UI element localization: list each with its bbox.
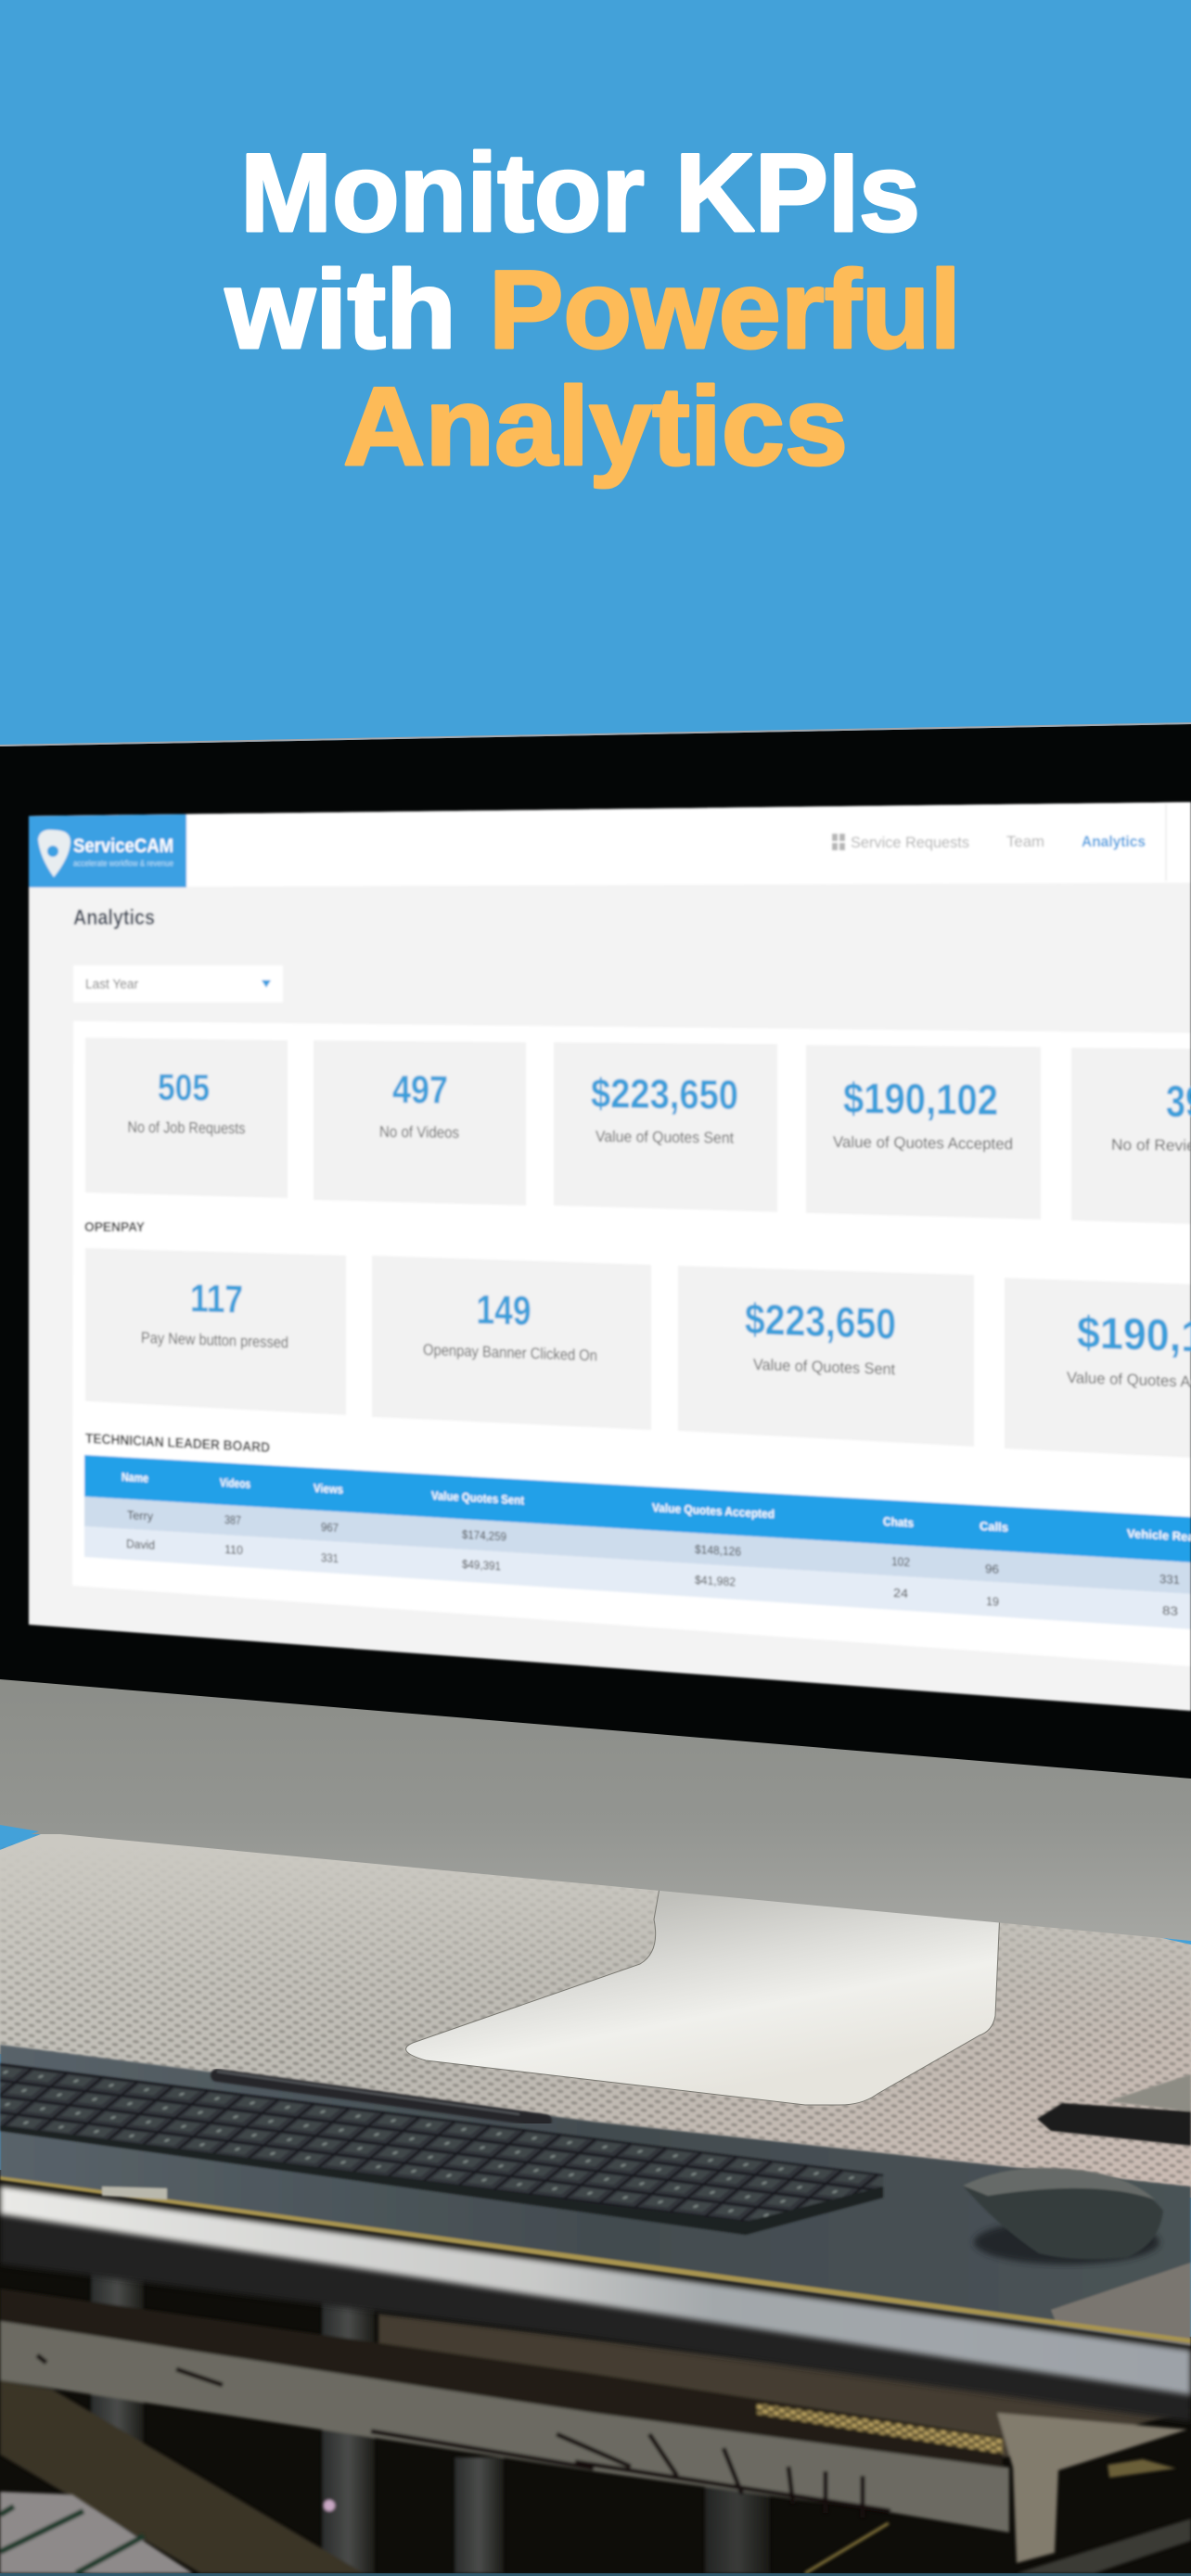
table row: Terry: 96 [985,1562,999,1576]
navigation [832,804,1166,881]
KPI card: quotes sent: $223,650 [591,1071,738,1118]
dark desk mat [0,2045,1191,2346]
monitor top edge highlight [0,723,1191,746]
table header row: Value Quotes Sent [431,1488,525,1508]
leader board table [84,1455,1191,1629]
navigation: Team [1006,833,1044,850]
table row: David: $49,391 [462,1557,501,1573]
table row: Terry: 967 [321,1520,339,1535]
table row: Terry [84,1497,1191,1594]
table row: Terry: Terry [127,1508,153,1524]
table header row: Views [314,1481,343,1497]
under-desk dark background [0,2170,1191,2576]
Openpay card: pay now: Pay New button pressed [141,1329,288,1352]
right blue wedge [1162,1938,1191,1945]
Openpay card: pay now: 117 [190,1276,243,1321]
KPI card: job requests: No of Job Requests [128,1118,245,1138]
table row: David: 110 [224,1542,243,1557]
monitor bezel [0,724,1191,1779]
logo block: accelerate workflow & revenue [73,859,173,868]
blue left wedge [0,1825,39,1845]
navigation: Analytics [1082,833,1146,850]
monitor [0,723,1191,1941]
logo block [29,814,186,887]
table row: David: David [126,1537,155,1552]
KPI card: videos [314,1040,526,1205]
table row: Terry: $148,126 [695,1542,741,1559]
date dropdown: Last Year [85,976,138,992]
title: Monitor KPIs [240,131,920,255]
table header row: Videos [220,1475,250,1491]
Openpay card: banner clicks: 149 [477,1287,531,1334]
page heading: Analytics [73,905,155,929]
KPI card: videos: 497 [392,1067,448,1112]
table row: Terry: $174,259 [462,1527,506,1544]
Openpay card: banner clicks [372,1256,651,1430]
KPI card: reviews [1071,1048,1191,1224]
KPI card: quotes accepted [806,1045,1041,1219]
KPI card: quotes accepted: $190,102 [843,1074,998,1124]
perforated desk surface [0,1827,1191,2198]
header bar [29,802,1191,887]
screen background [29,802,1191,1711]
phone and glass on desk [1037,2074,1191,2146]
table row: Terry: 331 [1159,1572,1180,1587]
metal rail [0,2186,1191,2422]
dashboard screen [29,802,1191,1711]
Openpay card: quotes sent: Value of Quotes Sent [753,1356,895,1378]
monitor stand [406,1882,1000,2105]
KPI card: quotes accepted: Value of Quotes Accepted [833,1133,1013,1153]
table row: David: 24 [893,1586,908,1600]
Openpay card: quotes accepted [1005,1278,1191,1458]
bottom edge strip [0,2573,1191,2576]
table row: Terry: 387 [224,1512,241,1527]
table header row: Name [122,1470,148,1486]
KPI card: quotes sent [554,1042,777,1212]
date dropdown [73,965,283,1002]
mouse [963,2168,1163,2264]
KPI card: job requests [85,1038,288,1198]
section heading: technician leader board: TECHNICIAN LEADER BOARD [85,1431,270,1456]
pen [217,2072,545,2121]
title: with [224,248,456,372]
logo block: ServiceCAM [73,835,173,857]
KPI card: quotes sent: Value of Quotes Sent [596,1128,734,1147]
section heading: Openpay: OPENPAY [84,1219,145,1235]
KPI card: videos: No of Videos [379,1123,459,1141]
title: Powerful [489,248,961,372]
white content panel [72,1021,1191,1666]
Openpay card: pay now [85,1248,346,1415]
Openpay card: quotes sent: $223,650 [745,1294,896,1348]
title [224,131,961,489]
KPI card: job requests: 505 [158,1067,210,1109]
table header row: Calls [980,1519,1008,1535]
table row: David [84,1526,1191,1629]
table row: David: $41,982 [695,1573,736,1588]
table header row: Value Quotes Accepted [652,1500,775,1521]
table row: David: 83 [1162,1603,1178,1618]
crate at lower left [0,2492,193,2573]
table row: David: 331 [321,1550,339,1565]
table header row [84,1455,1191,1562]
keyboard [0,2063,883,2235]
table row: Terry: 102 [891,1554,910,1569]
Openpay card: quotes sent [678,1266,974,1447]
navigation: Service Requests [851,834,969,851]
Openpay card: banner clicks: Openpay Banner Clicked On [423,1341,597,1365]
table legs and under-desk structure [0,2253,1191,2573]
table header row: Chats [883,1514,914,1530]
title: Analytics [343,364,848,489]
table row: David: 19 [986,1594,999,1609]
monitor chin [0,1674,1191,1941]
